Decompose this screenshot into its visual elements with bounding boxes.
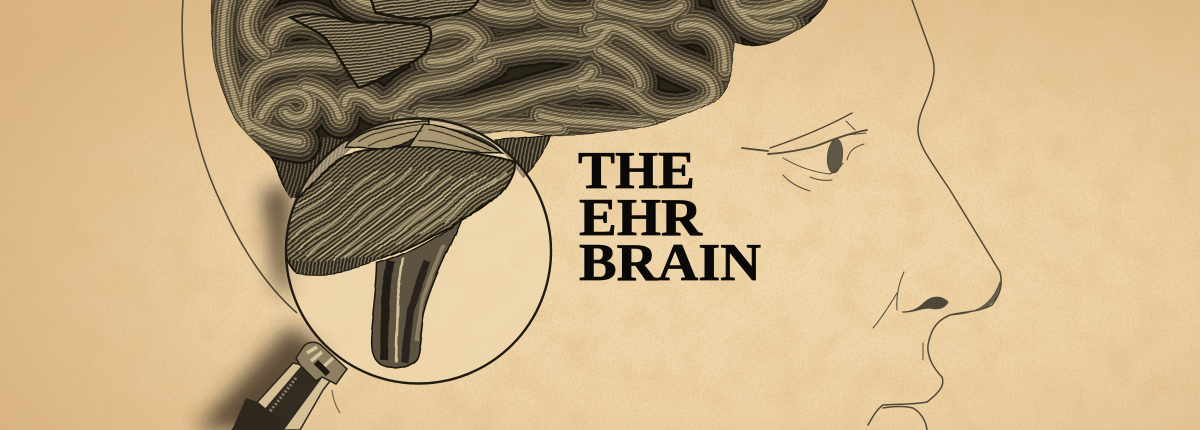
nose shading <box>950 282 1000 315</box>
nose wing <box>873 272 904 328</box>
head outline: back of skull <box>182 0 297 313</box>
cerebellum lower band <box>287 258 385 273</box>
magnified brain stem <box>372 218 462 367</box>
handle ring <box>232 398 282 430</box>
lens top cover over brain <box>345 126 500 160</box>
title: EHR <box>579 189 703 247</box>
title: THE <box>578 142 695 200</box>
collar beads <box>307 347 333 370</box>
large hatched fold <box>290 15 432 87</box>
iris <box>826 138 844 174</box>
eye wrinkles <box>783 144 864 191</box>
lower lip <box>883 406 927 430</box>
light muscle streaks <box>292 168 506 262</box>
engraving line overlay <box>212 0 827 196</box>
loose string <box>332 390 340 413</box>
forehead and nose line <box>868 0 1001 425</box>
nostril <box>902 297 948 312</box>
brain stem bands <box>384 262 392 360</box>
ornate collar <box>296 342 347 384</box>
brain silhouette <box>211 0 829 198</box>
magnifying lens <box>282 118 551 384</box>
title: BRAIN <box>579 234 761 292</box>
eye corner tick <box>742 148 768 151</box>
title <box>578 142 761 292</box>
magnified cerebellum <box>282 122 515 367</box>
handle dark centre <box>252 358 322 430</box>
upper eyelid <box>768 130 867 154</box>
back lobe behind lens <box>495 135 550 176</box>
lens rim <box>286 118 551 384</box>
face profile <box>742 0 1001 430</box>
philtrum tick <box>922 343 924 360</box>
upper leaf arcs <box>345 122 430 149</box>
eyebrow <box>770 113 852 148</box>
lower eyelid <box>783 158 843 174</box>
upper hatched fold <box>370 0 480 19</box>
brain folds <box>212 0 827 196</box>
handle shaft <box>232 363 337 430</box>
magnifying glass handle <box>232 342 347 430</box>
arc ridges <box>358 125 490 150</box>
brain stem ridges behind the lens <box>262 135 360 198</box>
lens glass <box>286 119 550 383</box>
brain illustration <box>200 0 840 210</box>
magnifier drop shadow <box>195 185 325 430</box>
